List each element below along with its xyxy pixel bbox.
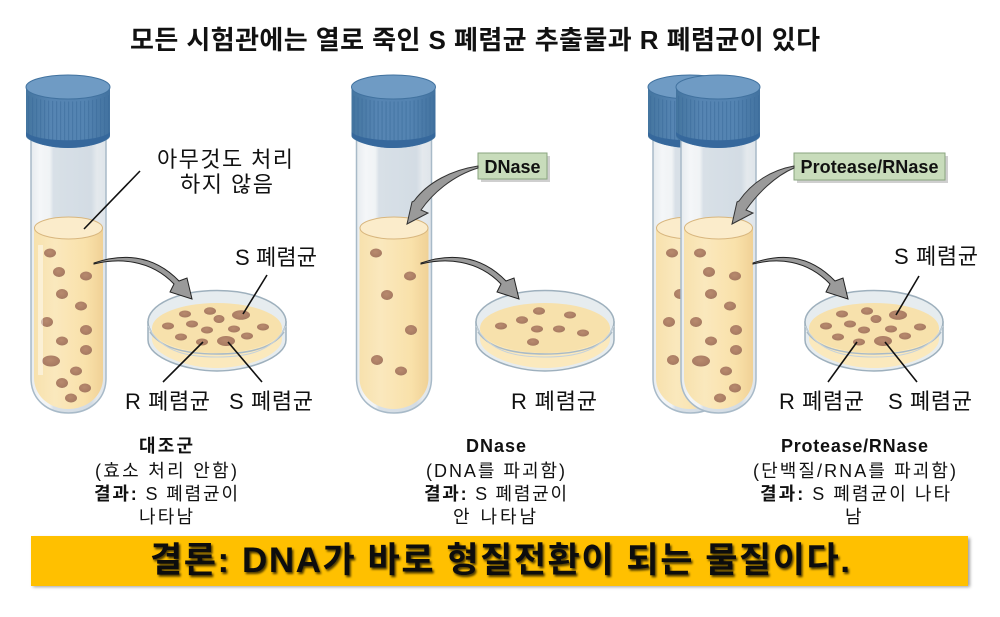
caption: control group: 결과: S 폐렴균이 [94, 484, 238, 504]
label: nothing treated: 아무것도 처리 [157, 147, 293, 172]
icon: petri dish with S and R colonies [805, 290, 943, 371]
icon: petri dish with S and R colonies [148, 290, 286, 371]
arrow: tube to dish [94, 257, 192, 299]
tag: DNase: DNase [484, 157, 541, 177]
callout: conclusion banner [31, 536, 970, 587]
label: S colony bottom: S 폐렴균 [888, 389, 972, 414]
caption: DNase: DNase [466, 436, 526, 456]
panel: control group [26, 75, 317, 414]
label: R colony: R 폐렴균 [125, 389, 210, 414]
arrow: tube to dish [421, 257, 519, 299]
leader line to tube [84, 171, 140, 229]
caption: DNase: 안 나타남 [453, 507, 536, 527]
icon: petri dish with R colonies [476, 290, 614, 371]
panel: DNase group [352, 75, 614, 414]
leader lines to colonies [828, 276, 919, 382]
arrow: DNase into tube [407, 166, 478, 224]
caption: Protease/RNase: (단백질/RNA를 파괴함) [753, 461, 956, 481]
title: 모든 시험관에는 열로 죽인 S 폐렴균 추출물과 R 폐렴균이 있다 [130, 25, 820, 55]
caption: control group [94, 436, 238, 527]
tag: DNase [478, 153, 550, 182]
tag: Protease/RNase: Protease/RNase [800, 157, 938, 177]
label: R colony: R 폐렴균 [779, 389, 864, 414]
panel: Protease/RNase group [648, 75, 978, 414]
icon: back test tube [648, 75, 732, 413]
caption: control group: 나타남 [139, 507, 193, 527]
leader lines to colonies [163, 275, 267, 382]
caption: Protease/RNase: 남 [845, 507, 862, 527]
arrow: enzyme into tube [732, 166, 794, 224]
label: S colony top: S 폐렴균 [894, 244, 978, 269]
label: nothing treated: 하지 않음 [180, 172, 273, 197]
caption: Protease/RNase: Protease/RNase [781, 436, 928, 456]
icon: test tube with DNase [352, 75, 436, 413]
caption: control group: 대조군 [139, 436, 193, 456]
caption: Protease/RNase: 결과: S 폐렴균이 나타 [760, 484, 950, 504]
icon: test tube with untreated mixture [26, 75, 110, 413]
tag: Protease/RNase [794, 153, 948, 183]
arrow: tube to dish [753, 257, 848, 299]
icon: front test tube [676, 75, 760, 413]
caption: DNase: (DNA를 파괴함) [426, 461, 565, 481]
caption: DNase [424, 436, 567, 527]
label: S colony bottom: S 폐렴균 [229, 389, 313, 414]
label: S colony top: S 폐렴균 [235, 245, 317, 270]
caption: Protease/RNase [753, 436, 956, 527]
label: nothing treated [157, 147, 293, 197]
callout: conclusion banner: 결론: DNA가 바로 형질전환이 되는 물질이다. [150, 541, 850, 580]
caption: DNase: 결과: S 폐렴균이 [424, 484, 567, 504]
label: R colony: R 폐렴균 [511, 389, 597, 414]
caption: control group: (효소 처리 안함) [95, 461, 237, 481]
